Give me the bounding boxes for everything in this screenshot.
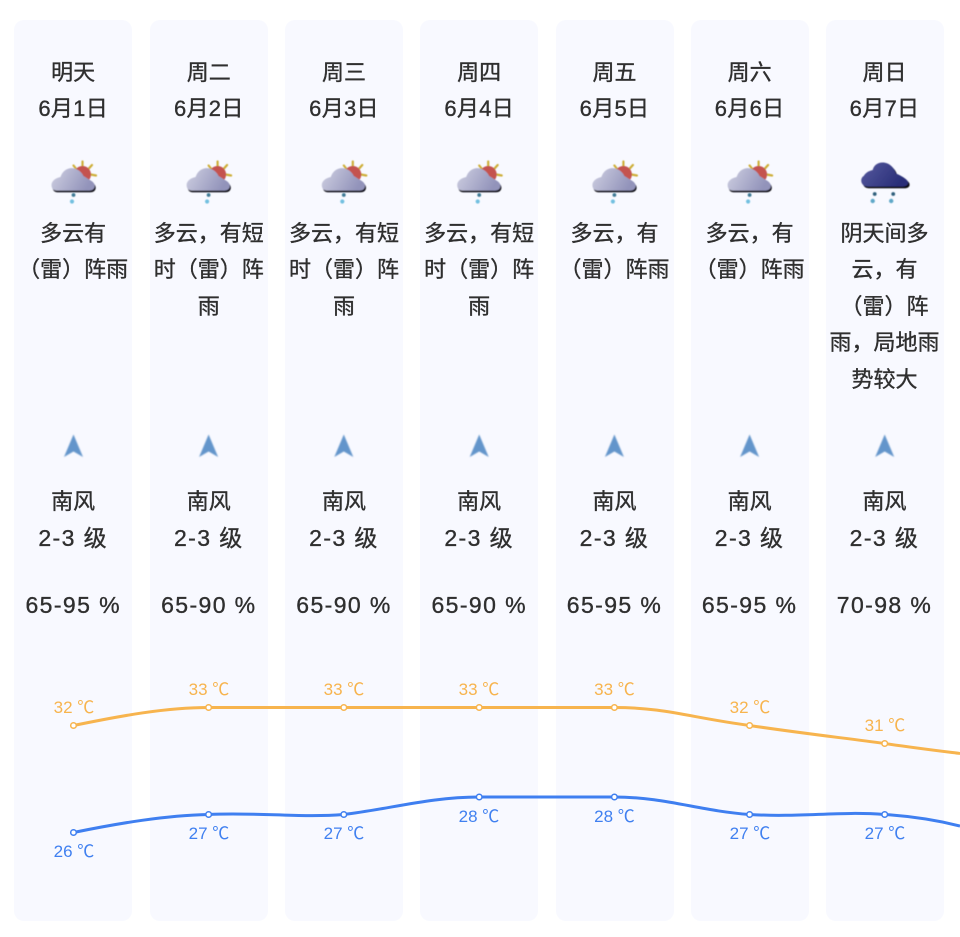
chart: high temperature line: 33 ℃ — [594, 680, 635, 699]
chart: low temperature line: 27 ℃ — [324, 824, 364, 843]
weather description: day 3 — [289, 221, 399, 319]
humidity: day 5: 65-95 % — [567, 592, 662, 618]
weather description: day 3: 雨 — [333, 294, 355, 319]
date: day 3 — [309, 60, 379, 121]
date: day 1: 6月1日 — [38, 96, 108, 121]
chart: low temperature line: 27 ℃ — [189, 824, 229, 843]
date: day 3: 6月3日 — [309, 96, 379, 121]
weather description: day 6: （雷）阵雨 — [695, 257, 805, 282]
humidity: day 6: 65-95 % — [702, 592, 797, 618]
weather description: day 1 — [18, 221, 128, 282]
wind: day 3 — [309, 489, 379, 551]
date: day 4 — [444, 60, 514, 121]
weather description: day 2: 多云，有短 — [154, 221, 264, 246]
panel: day 1 — [14, 20, 132, 921]
chart: high temperature line: 33 ℃ — [324, 680, 364, 699]
wind: day 2: 南风 — [187, 489, 231, 514]
date: day 2 — [174, 60, 244, 121]
chart: low temperature line — [54, 794, 960, 861]
date: day 7 — [850, 60, 919, 121]
icon: overcast heavy rain, day 7 — [861, 162, 910, 203]
panel: day 6 — [691, 20, 809, 921]
weather description: day 7: 阴天间多 — [840, 221, 928, 246]
date: day 6: 6月6日 — [715, 96, 784, 121]
weather description: day 4: 时（雷）阵 — [424, 257, 534, 282]
icon: partly cloudy with rain, day 5 — [592, 162, 637, 204]
humidity: day 4: 65-90 % — [431, 592, 527, 618]
chart: low temperature line: 27 ℃ — [865, 824, 905, 843]
chart: low temperature line: 28 ℃ — [594, 807, 635, 826]
weather description: day 6 — [695, 221, 805, 282]
panel: day 4 — [420, 20, 538, 921]
weather description: day 2: 时（雷）阵 — [154, 257, 264, 282]
date: day 7: 6月7日 — [850, 96, 919, 121]
chart: low temperature line: 27 ℃ — [730, 824, 770, 843]
date: day 4: 6月4日 — [444, 96, 514, 121]
wind: day 6: 2-3 级 — [715, 525, 784, 551]
humidity: day 1: 65-95 % — [25, 592, 121, 618]
icon: partly cloudy with rain, day 3 — [322, 162, 366, 204]
wind: day 3: 2-3 级 — [309, 525, 379, 551]
wind: day 1: 南风 — [51, 489, 95, 514]
icon: wind arrow, day 1 — [64, 434, 83, 457]
panel: day 5 — [556, 20, 674, 921]
date: day 6: 周六 — [728, 60, 772, 85]
weather description: day 7: 势较大 — [851, 367, 918, 392]
wind: day 4 — [444, 489, 514, 551]
date: day 3: 周三 — [322, 60, 366, 85]
wind: day 2 — [174, 489, 244, 551]
weather description: day 7: （雷）阵 — [840, 294, 928, 319]
wind: day 7: 2-3 级 — [850, 525, 919, 551]
wind: day 6: 南风 — [728, 489, 772, 514]
panel: day 3 — [285, 20, 403, 921]
weather description: day 4: 雨 — [468, 294, 490, 319]
chart: high temperature line — [54, 680, 960, 754]
date: day 1 — [38, 60, 108, 121]
wind: day 5: 南风 — [592, 489, 636, 514]
date: day 1: 明天 — [51, 60, 95, 85]
wind: day 4: 2-3 级 — [444, 525, 514, 551]
weather description: day 7: 云，有 — [851, 257, 918, 282]
icon: partly cloudy with rain, day 2 — [187, 162, 231, 204]
weather description: day 5 — [559, 221, 670, 282]
weather description: day 6: 多云，有 — [706, 221, 794, 246]
weather description: day 1: （雷）阵雨 — [18, 257, 128, 282]
humidity: day 3: 65-90 % — [296, 592, 392, 618]
panel: day 7 — [826, 20, 944, 921]
humidity: day 7: 70-98 % — [837, 592, 932, 618]
wind: day 3: 南风 — [322, 489, 366, 514]
date: day 5 — [580, 60, 649, 121]
icon: partly cloudy with rain, day 6 — [728, 162, 772, 204]
date: day 2: 6月2日 — [174, 96, 244, 121]
icon: wind arrow, day 2 — [199, 434, 218, 457]
weather description: day 4 — [424, 221, 534, 319]
date: day 5: 6月5日 — [580, 96, 649, 121]
wind: day 2: 2-3 级 — [174, 525, 244, 551]
weather description: day 3: 时（雷）阵 — [289, 257, 399, 282]
icon: wind arrow, day 6 — [740, 434, 759, 457]
date: day 2: 周二 — [187, 60, 231, 85]
wind: day 7 — [850, 489, 919, 551]
date: day 4: 周四 — [457, 60, 501, 85]
wind: day 4: 南风 — [457, 489, 501, 514]
weather description: day 2: 雨 — [198, 294, 220, 319]
chart: high temperature line: 32 ℃ — [730, 698, 770, 717]
chart: high temperature line: 32 ℃ — [54, 698, 94, 717]
chart: high temperature line: 33 ℃ — [459, 680, 499, 699]
wind: day 7: 南风 — [862, 489, 906, 514]
weather description: day 5: （雷）阵雨 — [559, 257, 670, 282]
wind: day 5: 2-3 级 — [580, 525, 649, 551]
wind: day 6 — [715, 489, 784, 551]
icon: wind arrow, day 3 — [334, 434, 353, 457]
weather description: day 5: 多云，有 — [570, 221, 658, 246]
weather description: day 7: 雨，局地雨 — [829, 330, 940, 355]
date: day 5: 周五 — [592, 60, 636, 85]
weather description: day 7 — [829, 221, 940, 392]
icon: partly cloudy with rain, day 1 — [52, 162, 96, 204]
icon: wind arrow, day 4 — [470, 434, 489, 457]
chart: low temperature line: 26 ℃ — [54, 842, 94, 861]
chart: low temperature line: 28 ℃ — [459, 807, 499, 826]
weather description: day 1: 多云有 — [40, 221, 106, 246]
panel: day 2 — [150, 20, 268, 921]
humidity: day 2: 65-90 % — [161, 592, 257, 618]
chart: high temperature line: 33 ℃ — [189, 680, 229, 699]
wind: day 5 — [580, 489, 649, 551]
weather description: day 2 — [154, 221, 264, 319]
chart: high temperature line: 31 ℃ — [865, 716, 905, 735]
icon: wind arrow, day 5 — [605, 434, 624, 457]
date: day 6 — [715, 60, 784, 121]
wind: day 1: 2-3 级 — [38, 525, 108, 551]
date: day 7: 周日 — [862, 60, 906, 85]
icon: wind arrow, day 7 — [875, 434, 894, 457]
wind: day 1 — [38, 489, 108, 551]
weather description: day 4: 多云，有短 — [424, 221, 534, 246]
icon: partly cloudy with rain, day 4 — [457, 162, 502, 204]
weather description: day 3: 多云，有短 — [289, 221, 399, 246]
